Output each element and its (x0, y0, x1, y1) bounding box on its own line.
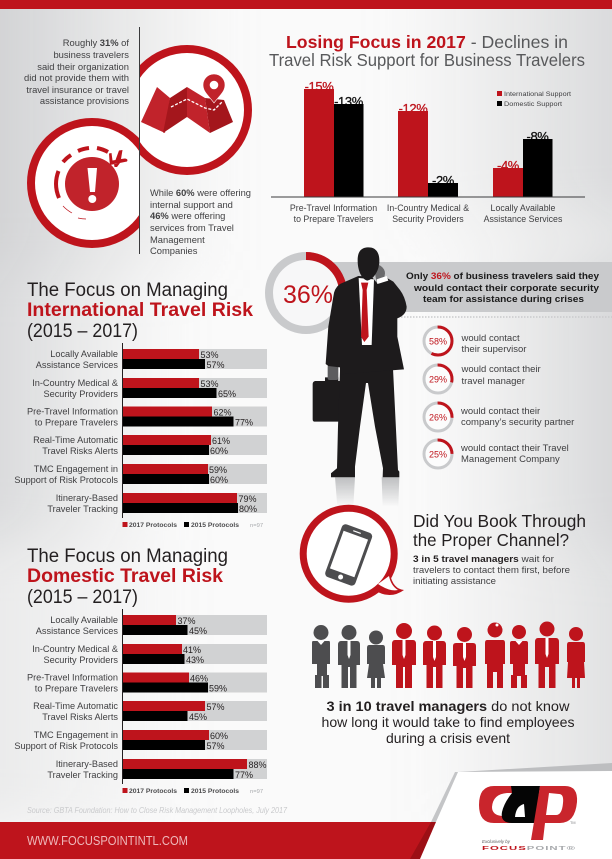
row: in-country: Security Providers (43, 389, 118, 399)
chart legend (497, 91, 571, 108)
heading: domestic travel risk: (2015 – 2017) (27, 587, 138, 608)
text: 60 percent: Companies (150, 245, 198, 256)
row: itinerary: Itinerary-Based (56, 493, 118, 503)
tie (361, 283, 369, 342)
row: real-time: Real-Time Automatic (33, 435, 118, 445)
callout text: Only 36% of business travelers said they (406, 271, 600, 282)
text: 3 in 5: initiating assistance (413, 576, 496, 586)
chart axis labels: to Prepare Travelers (294, 214, 374, 224)
person 1 (312, 625, 330, 688)
row: tmc: 60% (210, 731, 228, 741)
icon: alert with plane in circle (31, 122, 153, 244)
chart legend: Domestic Support (504, 101, 562, 108)
row: in-country: In-Country Medical & (32, 644, 118, 654)
panel: proper channel (303, 508, 586, 599)
row: real-time (33, 701, 267, 722)
text: 60 percent: Management (150, 234, 205, 245)
row: in-country (32, 378, 267, 399)
text: 60 percent: services from Travel (150, 222, 234, 233)
row: pre-travel: Pre-Travel Information (27, 672, 118, 682)
row: tmc: Support of Risk Protocols (14, 741, 118, 751)
row: itinerary: Itinerary-Based (56, 759, 118, 769)
row: real-time: 57% (206, 702, 225, 712)
heading: losing focus (269, 32, 585, 70)
row: locally available (36, 615, 267, 636)
text: 3 in 5 (413, 554, 570, 586)
legend: 2015 Protocols (191, 788, 239, 795)
legend: 2015 Protocols (191, 522, 239, 529)
text: security partner (460, 406, 574, 428)
row: pre-travel (27, 672, 267, 694)
icon: phone in speech bubble (303, 508, 404, 599)
chart axis labels: Security Providers (392, 214, 464, 224)
row: in-country (32, 644, 267, 665)
heading (413, 511, 586, 550)
row: pre-travel: 59% (209, 684, 227, 694)
businessman silhouette (313, 247, 407, 507)
heading: international travel risk: The Focus on Managing (27, 280, 228, 301)
heading: Did You Book Through (413, 511, 586, 531)
heading: domestic travel risk: Domestic Travel Risk (27, 566, 223, 587)
row: real-time: Travel Risks Alerts (42, 712, 118, 722)
jacket (326, 276, 407, 374)
text: supervisor: their supervisor (462, 344, 526, 355)
row: pre-travel: 46% (190, 674, 208, 684)
row: itinerary: Traveler Tracking (47, 504, 118, 514)
shirt (359, 278, 374, 345)
pictogram: 10 people (312, 622, 585, 688)
callout text: would contact their corporate security (413, 283, 600, 294)
bar chart: declines: -13% (334, 94, 364, 109)
row: locally available: Locally Available (50, 615, 118, 625)
briefcase (313, 377, 353, 422)
corner logo panel (410, 763, 612, 859)
row: real-time: Travel Risks Alerts (42, 446, 118, 456)
dotted line (398, 316, 612, 318)
row: locally available: 45% (189, 626, 207, 636)
hand (328, 365, 338, 380)
text: 60 percent: internal support and (150, 199, 233, 210)
row: itinerary: 80% (239, 504, 257, 514)
text: 3 in 5: 3 in 5 travel managers wait for (413, 554, 554, 564)
logo: cap: Exclusively by (482, 839, 511, 844)
person 7 (485, 622, 505, 688)
text: 60 percent (150, 187, 251, 256)
chart legend: International Support (504, 91, 571, 98)
chart axis labels: Locally Available (491, 203, 556, 213)
row: pre-travel: 62% (214, 408, 232, 418)
row: pre-travel: 77% (235, 418, 253, 428)
legend (122, 788, 263, 795)
row: real-time: 45% (189, 712, 207, 722)
heading: international travel risk: (2015 – 2017) (27, 321, 138, 342)
row: tmc: TMC Engagement in (34, 464, 118, 474)
text: supervisor: would contact (460, 333, 520, 344)
row: tmc: 59% (209, 465, 227, 475)
callout text (406, 271, 600, 305)
callout text: team for assistance during crises (423, 294, 584, 305)
text: travel manager (460, 364, 541, 387)
row: locally available: Assistance Services (36, 360, 118, 370)
row: in-country: 41% (183, 645, 201, 655)
person 6 (453, 627, 476, 688)
row: real-time (33, 435, 267, 456)
row: itinerary (47, 493, 267, 514)
person 9 (535, 622, 559, 688)
legend: n=97 (250, 523, 263, 529)
row: tmc: 57% (206, 741, 225, 751)
floor reflection (335, 477, 399, 507)
heading: domestic travel risk (27, 546, 228, 608)
chart axis labels (290, 203, 563, 224)
head (358, 247, 379, 281)
ring: 25 percent: 25% (429, 450, 447, 460)
panel: travel insurance statistics (24, 27, 251, 256)
row: real-time: 61% (212, 436, 230, 446)
person 4 (392, 623, 416, 688)
person 8 (510, 625, 528, 688)
ring: 25 percent (424, 440, 452, 468)
row: real-time: 60% (210, 446, 228, 456)
heading: the Proper Channel? (413, 530, 569, 550)
heading: losing focus: Losing Focus in 2017 - Declines in (286, 32, 568, 52)
panel: 36 percent callout (269, 256, 612, 330)
row: itinerary: 77% (235, 770, 253, 780)
text: 31 percent: did not provide them with (24, 72, 129, 83)
heading: domestic travel risk: The Focus on Managing (27, 546, 228, 567)
logo: cap: TM (570, 821, 575, 825)
row: itinerary: 88% (248, 760, 267, 770)
row: itinerary: Traveler Tracking (47, 770, 118, 780)
ring: 26 percent: 26% (429, 412, 447, 422)
text: 3 in 10 (322, 698, 574, 746)
ring: 29 percent: 29% (429, 374, 447, 384)
row: pre-travel: to Prepare Travelers (35, 418, 118, 428)
ring: 26 percent (424, 403, 452, 431)
row: in-country: In-Country Medical & (32, 378, 118, 388)
row: tmc (14, 730, 267, 751)
text: 60 percent: While 60% were offering (150, 187, 251, 198)
row: itinerary: 79% (238, 494, 257, 504)
person 3 (367, 630, 385, 688)
row: pre-travel (27, 406, 267, 428)
panel: who travelers would contact (424, 327, 574, 468)
chart: international travel risk (14, 343, 267, 529)
axis (122, 609, 123, 784)
row: tmc: Support of Risk Protocols (14, 475, 118, 485)
row: pre-travel: Pre-Travel Information (27, 406, 118, 416)
text: 3 in 5: travelers to contact them first, before (413, 565, 570, 575)
text: 3 in 10: during a crisis event (386, 730, 510, 746)
row: in-country: 65% (218, 389, 236, 399)
row: tmc: 60% (210, 475, 228, 485)
legend: n=97 (250, 789, 263, 795)
logo: cap: FOCUS POINT® (482, 845, 576, 852)
heading: losing focus: Travel Risk Support for Business Travelers (269, 50, 585, 70)
text: 60 percent: 46% were offering (150, 210, 225, 221)
row: in-country: 53% (200, 379, 219, 389)
row: locally available (36, 349, 267, 370)
text: 31 percent (24, 37, 129, 106)
text: travel management company: would contact their Travel (460, 443, 569, 454)
row: tmc: TMC Engagement in (34, 730, 118, 740)
text: travel manager: would contact their (460, 364, 541, 375)
bar chart: declines: -8% (527, 129, 549, 144)
bar chart: declines: -15% (305, 79, 334, 94)
heading: international travel risk: International Travel Risk (27, 300, 253, 321)
row: locally available: Locally Available (50, 349, 118, 359)
bar chart: declines (271, 79, 585, 224)
text: 31 percent: said their organization (37, 61, 129, 72)
legend: 2017 Protocols (129, 522, 177, 529)
chart axis labels: Pre-Travel Information (290, 203, 377, 213)
logo: cap (479, 786, 577, 852)
legend (122, 522, 263, 529)
text: 3 in 10: 3 in 10 travel managers do not know (326, 698, 570, 714)
text: 31 percent: Roughly 31% of (63, 37, 129, 48)
bottom red bar (0, 822, 612, 859)
ring: 36 percent: 36% (283, 281, 333, 309)
text: travel manager: travel manager (462, 376, 525, 387)
text: 3 in 10: how long it would take to find employees (322, 714, 574, 730)
row: locally available: Assistance Services (36, 626, 118, 636)
row: real-time: Real-Time Automatic (33, 701, 118, 711)
person 5 (423, 626, 446, 688)
text: security partner: would contact their (460, 406, 540, 417)
heading: international travel risk (27, 280, 253, 342)
top red bar (0, 0, 612, 9)
chart axis labels: Assistance Services (484, 214, 563, 224)
website: WWW.FOCUSPOINTINTL.COM (27, 834, 188, 848)
ring: 58 percent: 58% (429, 336, 447, 346)
ring: 29 percent (424, 365, 452, 393)
divider line (139, 27, 140, 254)
bar chart: declines: -12% (399, 101, 428, 116)
person 10 (567, 627, 585, 688)
text: 31 percent: travel insurance or travel (26, 84, 129, 95)
text: 31 percent: business travelers (53, 49, 129, 60)
text: 31 percent: assistance provisions (40, 95, 129, 106)
ring: 36 percent (269, 256, 343, 330)
bar chart: declines: -2% (432, 173, 455, 188)
chart: domestic travel risk (14, 609, 267, 795)
person 2 (338, 625, 360, 688)
row: locally available: 53% (200, 350, 219, 360)
text: travel management company: Management Company (461, 454, 560, 465)
trousers (331, 368, 399, 477)
ring: 58 percent (424, 327, 452, 355)
row: pre-travel: to Prepare Travelers (35, 684, 118, 694)
row: tmc (14, 464, 267, 485)
row: in-country: Security Providers (43, 655, 118, 665)
bar chart: declines: -4% (497, 158, 520, 173)
chart axis labels: In-Country Medical & (387, 203, 469, 213)
phone hand (375, 265, 385, 283)
legend: 2017 Protocols (129, 788, 177, 795)
row: itinerary (47, 759, 267, 780)
grey band (330, 262, 612, 312)
row: locally available: 37% (178, 616, 196, 626)
text: security partner: company’s security partner (461, 417, 574, 428)
text: supervisor (460, 333, 526, 355)
source note: Source: GBTA Foundation: How to Close Risk Management Loopholes, July 2017 (27, 805, 287, 815)
row: locally available: 57% (206, 360, 225, 370)
axis (122, 343, 123, 518)
text: travel management company (460, 443, 569, 465)
icon: map in circle (126, 49, 248, 171)
row: in-country: 43% (186, 655, 204, 665)
